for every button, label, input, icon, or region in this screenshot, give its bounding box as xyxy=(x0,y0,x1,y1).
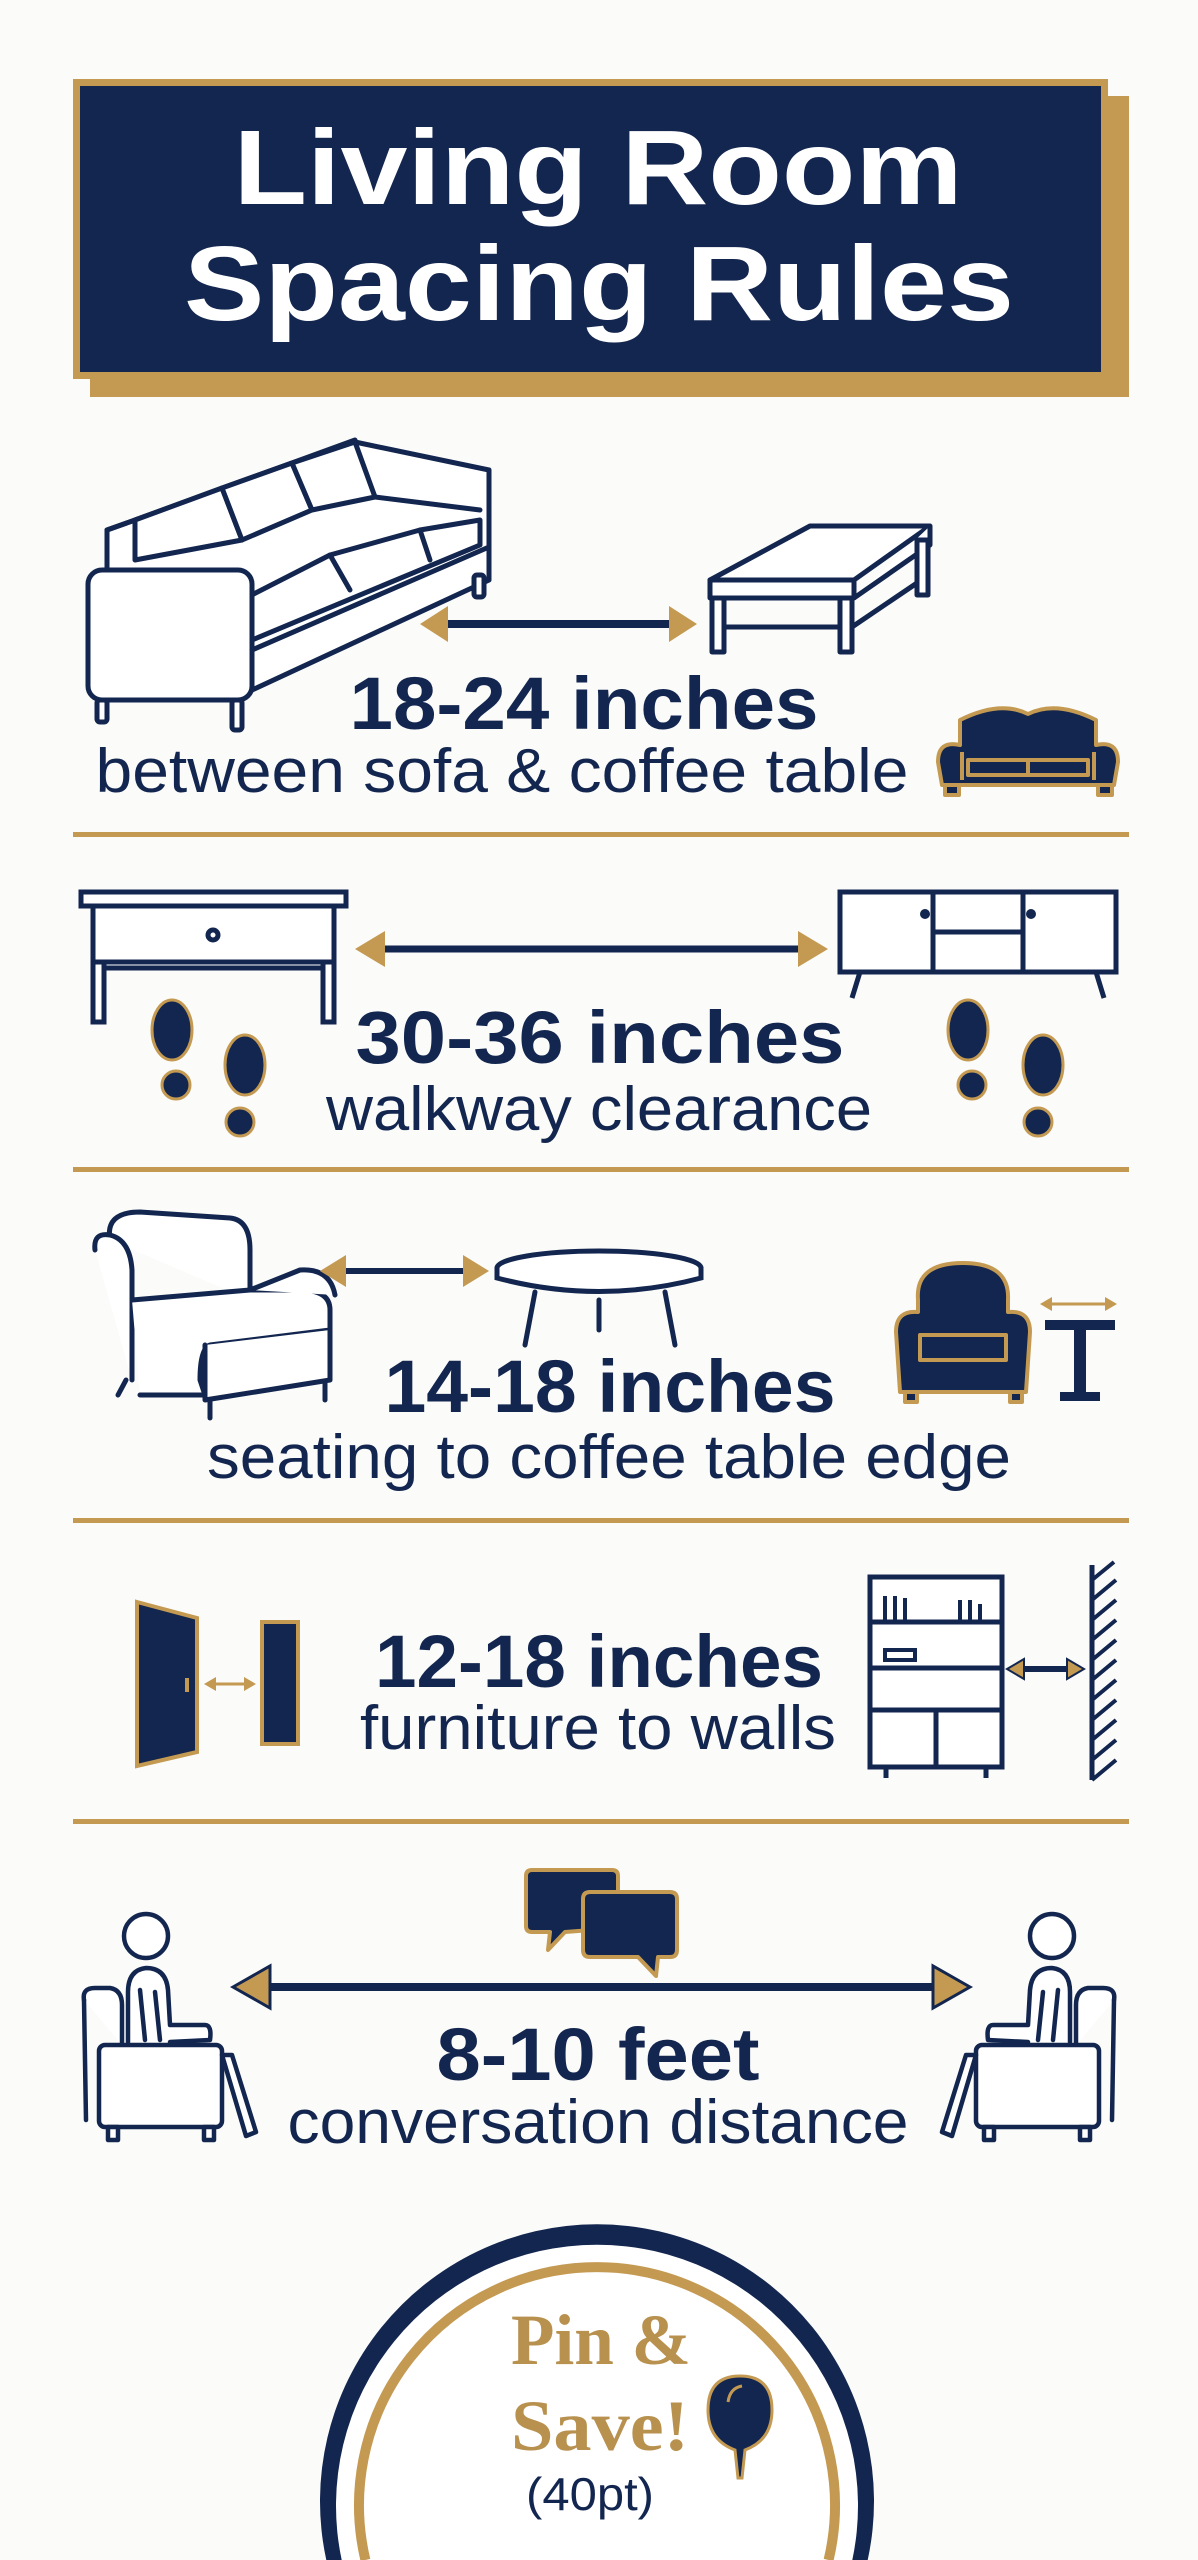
badge text xyxy=(511,2300,691,2466)
icon: footprints left xyxy=(152,1000,265,1136)
subtitle: furniture to walls xyxy=(360,1694,836,1763)
icon: door xyxy=(137,1602,298,1766)
arrow: shelf to wall xyxy=(1007,1659,1084,1679)
heading: 30-36 inches: 30-36 inches xyxy=(356,996,844,1079)
heading: 8-10 feet: 8-10 feet xyxy=(436,2013,760,2096)
heading: 12-18 inches: 12-18 inches xyxy=(375,1620,823,1703)
subtitle: between sofa & coffee table xyxy=(96,737,908,806)
title text: Living Room xyxy=(234,109,962,227)
icon: seated person right xyxy=(942,1914,1114,2140)
section 3: seating to table xyxy=(95,1212,1117,1492)
title text xyxy=(184,109,1014,343)
title banner xyxy=(73,79,1129,397)
icon: seated person left xyxy=(84,1914,256,2140)
arrow: door gap xyxy=(204,1677,256,1691)
icon: push pin xyxy=(708,2376,772,2478)
title text: Spacing Rules xyxy=(184,225,1014,343)
section 5: conversation distance xyxy=(84,1870,1114,2157)
section 4: furniture to walls xyxy=(137,1562,1116,1780)
icon: wall xyxy=(1092,1562,1116,1780)
icon: coffee table xyxy=(710,526,930,652)
heading: 14-18 inches: 14-18 inches xyxy=(384,1345,836,1428)
badge: pin & save xyxy=(320,2224,874,2560)
icon: console table xyxy=(81,892,346,1022)
icon: bookshelf xyxy=(870,1577,1002,1778)
arrow: sofa to table xyxy=(420,606,697,642)
arrow: chair to table xyxy=(320,1255,489,1287)
icon: armchair xyxy=(95,1212,335,1418)
badge text: Save! xyxy=(511,2386,689,2466)
subtitle: walkway clearance xyxy=(325,1075,872,1144)
badge text: Pin & xyxy=(511,2300,691,2380)
icon: round coffee table xyxy=(497,1251,701,1345)
subtitle: seating to coffee table edge xyxy=(207,1423,1011,1492)
icon: sofa xyxy=(88,440,489,730)
section 2: walkway xyxy=(81,892,1116,1144)
section 1: sofa to coffee table xyxy=(88,440,1118,806)
icon: speech bubbles xyxy=(526,1870,677,1976)
arrow: conversation xyxy=(233,1966,970,2008)
icon: footprints right xyxy=(948,1000,1063,1136)
icon: tv stand xyxy=(840,892,1116,998)
icon: armchair filled with side table xyxy=(896,1263,1117,1402)
icon: loveseat xyxy=(938,708,1118,795)
arrow: walkway xyxy=(355,931,828,967)
heading: 18-24 inches: 18-24 inches xyxy=(350,662,818,745)
subtitle: conversation distance xyxy=(288,2088,908,2157)
text: 40pt: (40pt) xyxy=(526,2468,654,2520)
